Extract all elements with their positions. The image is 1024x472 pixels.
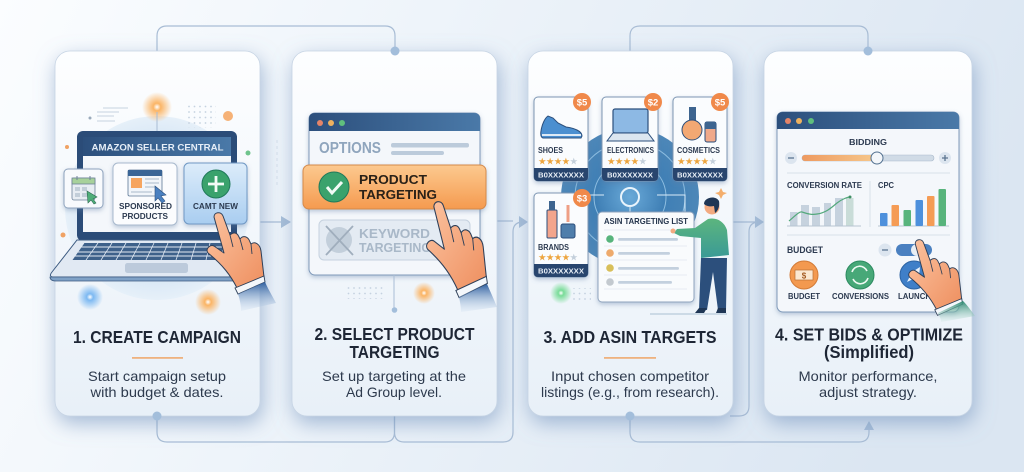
bidding slider: BIDDING — [849, 137, 887, 147]
budget control — [787, 244, 932, 256]
description: Set up targeting at the — [322, 368, 466, 384]
product card: cosmetics: B0XXXXXXX — [677, 170, 723, 180]
product card: brands: $3 — [577, 194, 587, 204]
heading: select product targeting: TARGETING — [350, 342, 440, 362]
product card: electronics: ELECTRONICS — [607, 146, 655, 155]
icons with labels: $ — [802, 272, 807, 280]
description: listings (e.g., from research). — [541, 384, 719, 400]
product card: shoes: B0XXXXXXX — [538, 170, 584, 180]
dashboard window — [777, 112, 959, 312]
product card: cosmetics: COSMETICS — [677, 146, 721, 155]
sponsored products card — [113, 163, 177, 225]
asin targeting list: ASIN TARGETING LIST — [604, 216, 689, 226]
description — [541, 368, 719, 400]
product targeting option: PRODUCT — [359, 172, 427, 187]
description — [322, 368, 466, 400]
chart: cpc: CPC — [878, 181, 894, 190]
product card: brands: ★★★★★ — [538, 252, 578, 264]
description: with budget & dates. — [89, 384, 224, 400]
product card: electronics — [602, 93, 662, 181]
connector dots — [152, 46, 872, 420]
product card: brands: BRANDS — [538, 243, 570, 252]
icons with labels — [788, 261, 931, 301]
product card: shoes: $5 — [577, 98, 588, 108]
description — [88, 368, 226, 400]
panel: step 4 set bids and optimize — [764, 51, 975, 416]
asin targeting list — [598, 212, 694, 302]
heading: set bids and optimize: 4. SET BIDS & OPTIMIZE — [775, 324, 963, 344]
sponsored products card: PRODUCTS — [122, 212, 169, 221]
laptop: AMAZON SELLER CENTRAL — [92, 142, 224, 154]
product card: brands: B0XXXXXXX — [538, 266, 584, 276]
camp new button — [184, 163, 247, 224]
decorative glow circle behind laptop — [60, 92, 250, 315]
icon: pointing hand — [427, 202, 497, 312]
panel: step 3 add asin targets — [528, 51, 733, 416]
keyword targeting option: TARGETING — [359, 240, 431, 255]
icon: adjusting hand — [909, 240, 975, 322]
product card: shoes: SHOES — [538, 146, 564, 155]
budget control: BUDGET — [787, 245, 823, 255]
product card: brands — [534, 189, 591, 277]
divider — [604, 357, 656, 359]
product card: electronics: B0XXXXXXX — [607, 170, 653, 180]
options window — [309, 113, 480, 313]
options window: OPTIONS — [319, 140, 381, 157]
bidding slider — [785, 137, 951, 164]
person pointing — [670, 197, 729, 313]
product card: shoes — [534, 93, 591, 181]
icon: calendar card — [64, 169, 103, 208]
description: Start campaign setup — [88, 368, 226, 384]
heading: add asin targets: 3. ADD ASIN TARGETS — [544, 327, 716, 347]
chart: cpc — [878, 181, 949, 226]
product targeting option — [303, 165, 486, 209]
product card: cosmetics: $5 — [715, 98, 726, 108]
panel: step 1 create campaign — [50, 51, 276, 416]
icons with labels: CONVERSIONS — [832, 292, 890, 301]
connectors between steps — [157, 26, 874, 442]
description: Monitor performance, — [798, 368, 938, 384]
heading: select product targeting — [314, 324, 475, 362]
chart: conversion rate: CONVERSION RATE — [787, 181, 863, 190]
product card: cosmetics — [673, 93, 729, 181]
product targeting option: TARGETING — [359, 187, 437, 202]
heading: select product targeting: 2. SELECT PRODUCT — [314, 324, 475, 344]
heading: create campaign: 1. CREATE CAMPAIGN — [73, 327, 241, 347]
sponsored products card: SPONSORED — [119, 202, 172, 211]
icon: pointing hand — [207, 213, 276, 311]
description: Input chosen competitor — [551, 368, 709, 384]
divider — [132, 357, 183, 359]
chart: conversion rate — [787, 181, 863, 226]
description: Ad Group level. — [346, 384, 442, 400]
keyword targeting option: KEYWORD — [359, 226, 430, 241]
icons with labels: LAUNCH — [898, 292, 931, 301]
laptop — [50, 131, 252, 281]
keyword targeting option — [319, 220, 470, 260]
product card: electronics: ★★★★★ — [607, 156, 647, 168]
product card: cosmetics: ★★★★★ — [677, 156, 717, 168]
icons with labels: BUDGET — [788, 292, 820, 301]
heading: set bids and optimize: (Simplified) — [824, 342, 914, 362]
heading: set bids and optimize — [775, 324, 963, 362]
panel: step 2 select product targeting — [292, 51, 497, 416]
description — [798, 368, 938, 400]
product card: electronics: $2 — [648, 98, 658, 108]
target disc — [550, 128, 727, 314]
product card: shoes: ★★★★★ — [538, 156, 578, 168]
description: adjust strategy. — [819, 384, 917, 400]
camp new button: CAMT NEW — [193, 202, 238, 211]
